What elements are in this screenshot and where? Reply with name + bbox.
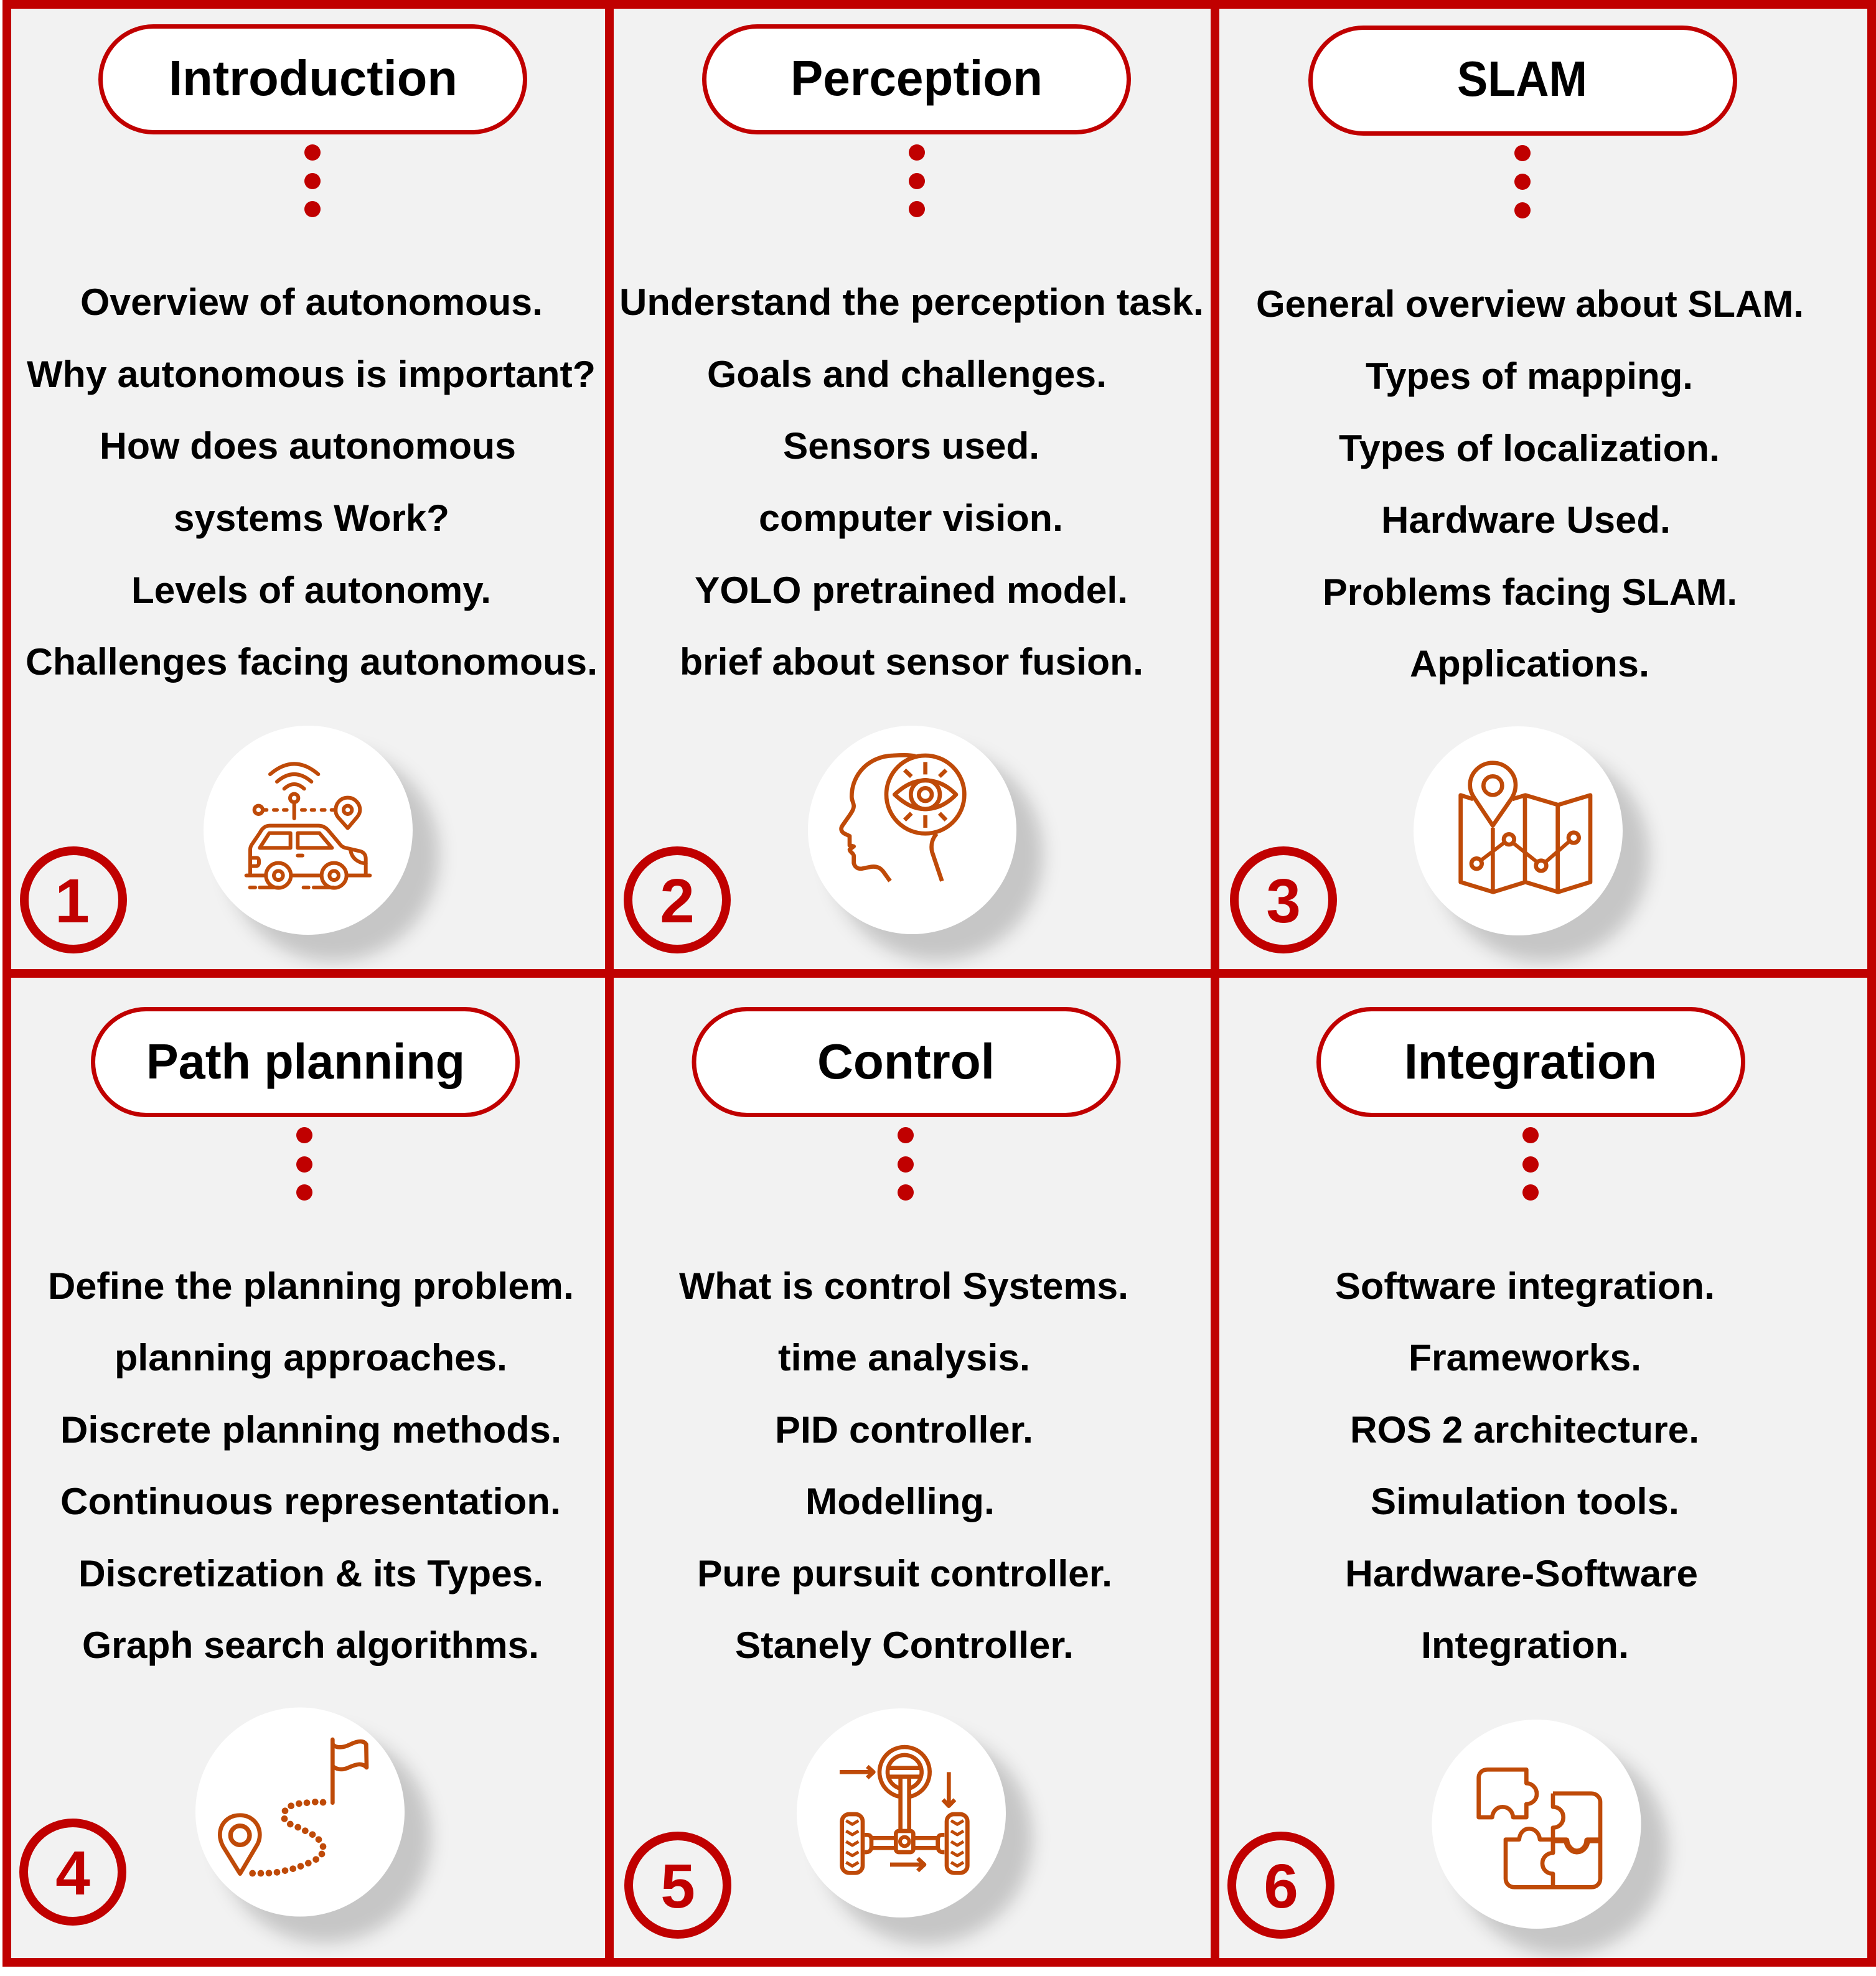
number badge 5: 5 [660,1852,695,1921]
connector dots [898,1127,914,1201]
text block: perception topics [619,281,1204,683]
heading: Introduction: Introduction [169,50,457,106]
heading: SLAM: SLAM [1457,51,1587,106]
text block: integration topics [1335,1265,1715,1666]
text block: path planning topics [48,1265,574,1666]
icon: steering system [797,1708,1033,1944]
text block: perception topics: Sensors used. [783,425,1039,467]
heading: Integration: Integration [1404,1034,1657,1089]
number badge 3: 3 [1266,866,1301,936]
number badge 6 [1232,1836,1330,1934]
number badge 4: 4 [55,1838,90,1908]
heading: Path planning: Path planning [146,1034,465,1089]
panel: Path planning [11,978,605,1958]
number badge 1 [24,851,123,949]
text block: introduction topics: Why autonomous is important? [27,354,596,395]
heading: Control: Control [817,1034,995,1089]
text block: path planning topics: Graph search algorithms. [82,1624,539,1666]
number badge 2 [628,851,726,949]
text block: introduction topics: Challenges facing autonomous. [26,641,598,683]
heading: Perception: Perception [790,50,1043,106]
number badge 3 [1234,851,1333,949]
text block: path planning topics: planning approaches. [115,1337,507,1379]
text block: integration topics: Software integration. [1335,1265,1715,1307]
text block: integration topics: Integration. [1421,1624,1629,1666]
text block: path planning topics: Discretization & its Types. [78,1553,543,1594]
text block: path planning topics: Continuous representation. [60,1481,561,1522]
number badge 2: 2 [660,866,695,936]
heading: Introduction [101,26,525,132]
panel: Introduction [11,9,605,969]
text block: control topics: time analysis. [778,1337,1030,1379]
icon: folded map with pin [1414,726,1649,962]
connector dots [1522,1127,1539,1201]
icon: connected car [204,726,439,962]
text block: integration topics: Simulation tools. [1371,1481,1679,1522]
text block: path planning topics: Define the planning problem. [48,1265,574,1307]
text block: SLAM topics [1256,283,1804,685]
connector dots [1514,145,1531,218]
text block: perception topics: Understand the perception task. [619,281,1204,323]
text block: SLAM topics: Hardware Used. [1381,499,1671,541]
heading: SLAM [1311,27,1735,133]
text block: SLAM topics: Types of mapping. [1366,355,1693,397]
text block: integration topics: Frameworks. [1409,1337,1641,1379]
text block: SLAM topics: Applications. [1410,643,1649,685]
panel: Integration [1219,978,1867,1958]
text block: perception topics: brief about sensor fusion. [680,641,1143,683]
text block: control topics: What is control Systems. [679,1265,1128,1307]
text block: introduction topics: Overview of autonomous. [80,281,543,323]
text block: SLAM topics: Types of localization. [1339,428,1720,469]
connector dots [304,144,321,217]
text block: perception topics: computer vision. [759,497,1063,539]
heading: Integration [1318,1009,1743,1115]
icon: head with eye [808,726,1043,961]
text block: control topics [679,1265,1128,1666]
text block: perception topics: Goals and challenges. [707,354,1107,395]
panel: Perception [614,9,1211,969]
text block: introduction topics: Levels of autonomy. [131,569,491,611]
number badge 5 [629,1836,727,1934]
text block: SLAM topics: General overview about SLAM. [1256,283,1804,325]
connector dots [909,144,925,217]
text block: control topics: Modelling. [805,1481,995,1522]
icon: puzzle pieces [1432,1720,1668,1955]
connector dots [296,1127,312,1201]
heading: Path planning [93,1009,518,1115]
heading: Control [694,1009,1119,1115]
text block: introduction topics: systems Work? [174,497,449,539]
icon: route from pin to flag [195,1708,431,1943]
text block: SLAM topics: Problems facing SLAM. [1323,571,1737,613]
text block: introduction topics [26,281,598,683]
number badge 1: 1 [55,866,90,936]
panel: Control [614,978,1211,1958]
number badge 6: 6 [1264,1852,1298,1921]
text block: control topics: Stanely Controller. [735,1624,1074,1666]
text block: control topics: PID controller. [775,1409,1033,1451]
text block: integration topics: Hardware-Software [1345,1553,1698,1594]
panel: SLAM [1219,9,1867,969]
number badge 4 [24,1823,122,1921]
text block: path planning topics: Discrete planning methods. [60,1409,561,1451]
text block: integration topics: ROS 2 architecture. [1350,1409,1699,1451]
text block: introduction topics: How does autonomous [100,425,516,467]
heading: Perception [705,26,1129,132]
text block: control topics: Pure pursuit controller. [697,1553,1112,1594]
text block: perception topics: YOLO pretrained model. [695,569,1128,611]
